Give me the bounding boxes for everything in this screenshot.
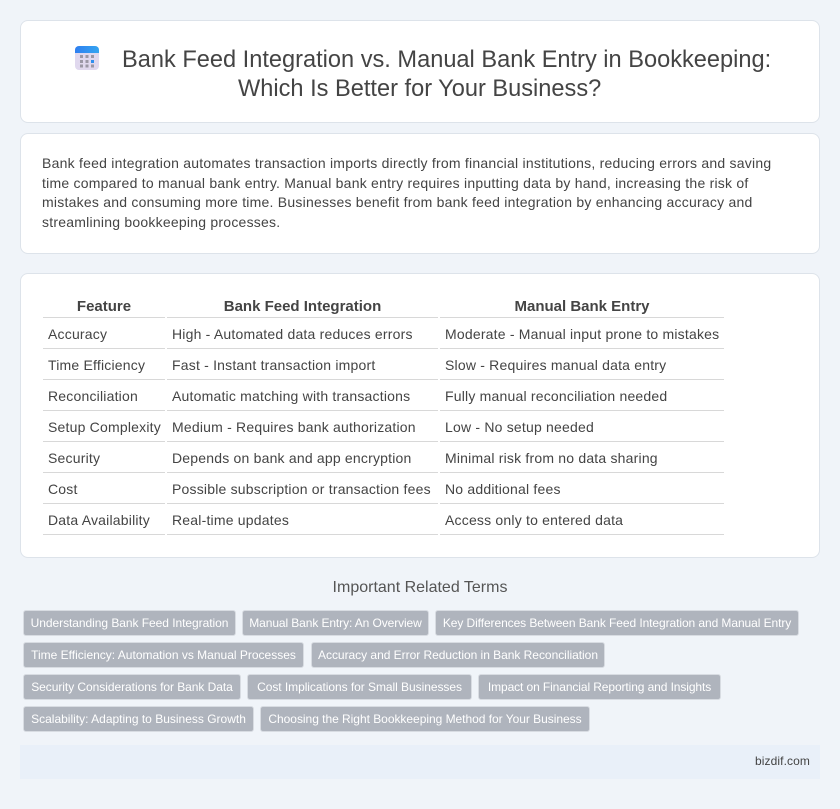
row: reconciliation: Automatic matching with transactions <box>172 388 410 404</box>
row: reconciliation: Reconciliation <box>48 388 138 404</box>
related terms tags: Cost Implications for Small Businesses <box>257 680 462 694</box>
row: setup complexity <box>48 419 594 435</box>
row: data availability: Real-time updates <box>172 512 289 528</box>
table header: Bank Feed Integration <box>224 298 381 315</box>
row: time efficiency: Time Efficiency <box>48 357 145 373</box>
row: security: Security <box>48 450 100 466</box>
row: security: Minimal risk from no data sharing <box>445 450 658 466</box>
row: cost: Possible subscription or transaction fees <box>172 481 431 497</box>
row: accuracy <box>48 326 719 342</box>
intro paragraph: time compared to manual bank entry. Manual bank entry requires inputting data by hand, increasing the risk of <box>42 175 749 191</box>
table header: Feature <box>77 298 131 315</box>
related terms tags: Understanding Bank Feed Integration <box>31 616 228 630</box>
heading <box>122 47 771 102</box>
footer bar <box>20 745 820 779</box>
row: time efficiency <box>48 357 666 373</box>
row: cost: Cost <box>48 481 78 497</box>
related terms tags: Scalability: Adapting to Business Growth <box>31 712 246 726</box>
icon: calendar <box>75 46 99 70</box>
related terms tags: Accuracy and Error Reduction in Bank Reconciliation <box>318 648 598 662</box>
heading: Which Is Better for Your Business? <box>238 76 601 102</box>
row: accuracy: Accuracy <box>48 326 107 342</box>
row: accuracy: High - Automated data reduces errors <box>172 326 413 342</box>
row: reconciliation: Fully manual reconciliation needed <box>445 388 667 404</box>
row: cost: No additional fees <box>445 481 561 497</box>
related terms tags <box>23 610 799 732</box>
table header <box>77 298 650 315</box>
intro paragraph: Bank feed integration automates transaction imports directly from financial institutions, reducing errors and saving <box>42 155 771 171</box>
table header: Manual Bank Entry <box>514 298 650 315</box>
row: security <box>48 450 658 466</box>
row: time efficiency: Slow - Requires manual data entry <box>445 357 666 373</box>
related terms tags: Impact on Financial Reporting and Insights <box>488 680 711 694</box>
related terms tags: Key Differences Between Bank Feed Integration and Manual Entry <box>443 616 791 630</box>
intro paragraph: streamlining bookkeeping processes. <box>42 214 280 230</box>
related terms tags: Security Considerations for Bank Data <box>31 680 233 694</box>
intro paragraph: mistakes and consuming more time. Businesses benefit from bank feed integration by enhancing accuracy and <box>42 194 753 210</box>
row: cost <box>48 481 561 497</box>
panel: introduction text <box>20 133 820 254</box>
row: data availability <box>48 512 623 528</box>
related terms tags: Choosing the Right Bookkeeping Method for Your Business <box>268 712 582 726</box>
related terms tags: Time Efficiency: Automation vs Manual Processes <box>31 648 296 662</box>
heading: Bank Feed Integration vs. Manual Bank Entry in Bookkeeping: <box>122 47 771 73</box>
panel: comparison table <box>20 273 820 558</box>
row: setup complexity: Medium - Requires bank authorization <box>172 419 416 435</box>
row: setup complexity: Low - No setup needed <box>445 419 594 435</box>
related terms tags: Manual Bank Entry: An Overview <box>249 616 422 630</box>
row: setup complexity: Setup Complexity <box>48 419 161 435</box>
footer source: bizdif.com <box>755 754 810 768</box>
row: data availability: Access only to entered data <box>445 512 623 528</box>
panel: title header <box>20 20 820 123</box>
heading: important related terms: Important Related Terms <box>333 579 507 596</box>
row: data availability: Data Availability <box>48 512 150 528</box>
row: time efficiency: Fast - Instant transaction import <box>172 357 375 373</box>
row: security: Depends on bank and app encryption <box>172 450 412 466</box>
row: reconciliation <box>48 388 667 404</box>
intro paragraph <box>42 155 771 230</box>
row: accuracy: Moderate - Manual input prone to mistakes <box>445 326 719 342</box>
